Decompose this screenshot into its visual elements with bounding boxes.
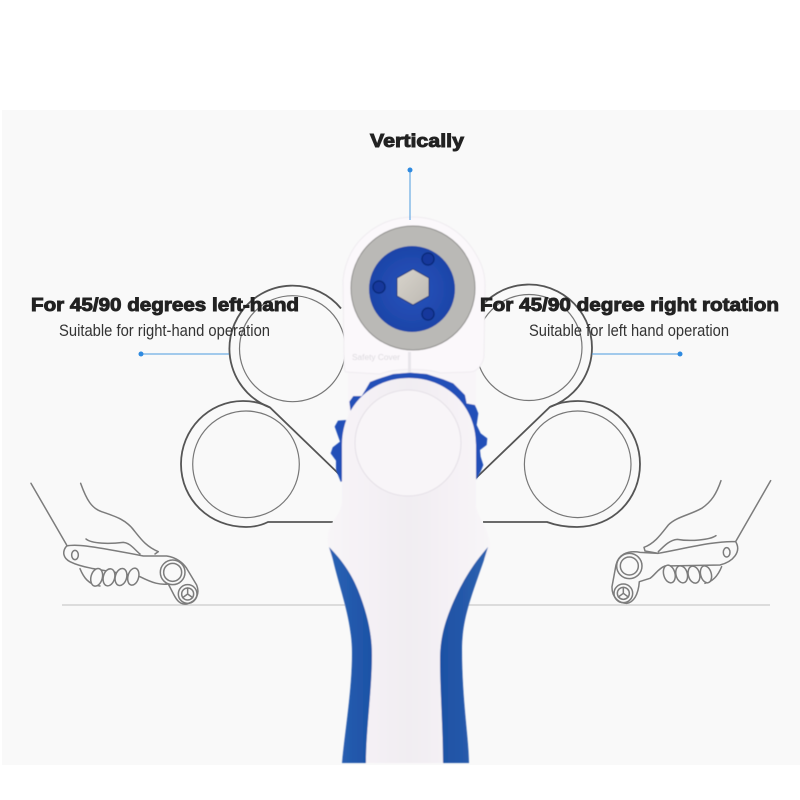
leader: right xyxy=(592,352,682,356)
blue blade hub xyxy=(369,246,455,332)
left hand drawing xyxy=(31,483,198,604)
ghost outline: lower left rotated cutter xyxy=(181,401,341,527)
handle button xyxy=(355,390,461,496)
ghost outline: lower right rotated cutter xyxy=(476,401,640,527)
hex bolt xyxy=(397,269,429,305)
rotary cutter product xyxy=(328,217,490,763)
heading: right rotation: For 45/90 degree right rotation xyxy=(480,295,779,315)
hub screws xyxy=(373,253,434,320)
safety cover xyxy=(343,217,485,374)
heading: vertically: Vertically xyxy=(370,131,464,151)
heading: left rotation: For 45/90 degrees left-hand xyxy=(31,295,299,315)
right hand drawing xyxy=(612,481,771,603)
ghost outline: upper left rotated cutter xyxy=(229,286,346,408)
ghost outline: upper right rotated cutter xyxy=(476,285,592,407)
baseline: work surface xyxy=(62,604,770,606)
left blue grip xyxy=(329,547,372,763)
round blade xyxy=(351,226,475,350)
leader: vertical xyxy=(408,168,412,220)
blue wavy dial xyxy=(331,373,487,482)
cover centre seam xyxy=(408,352,411,372)
safety cover label: Safety Cover xyxy=(352,353,400,362)
subtext: left: Suitable for right-hand operation xyxy=(59,321,270,340)
neck behind dial xyxy=(348,365,476,425)
subtext: right: Suitable for left hand operation xyxy=(529,321,729,340)
leader: left xyxy=(138,352,229,356)
handle body xyxy=(328,378,490,763)
right blue grip xyxy=(440,547,488,763)
